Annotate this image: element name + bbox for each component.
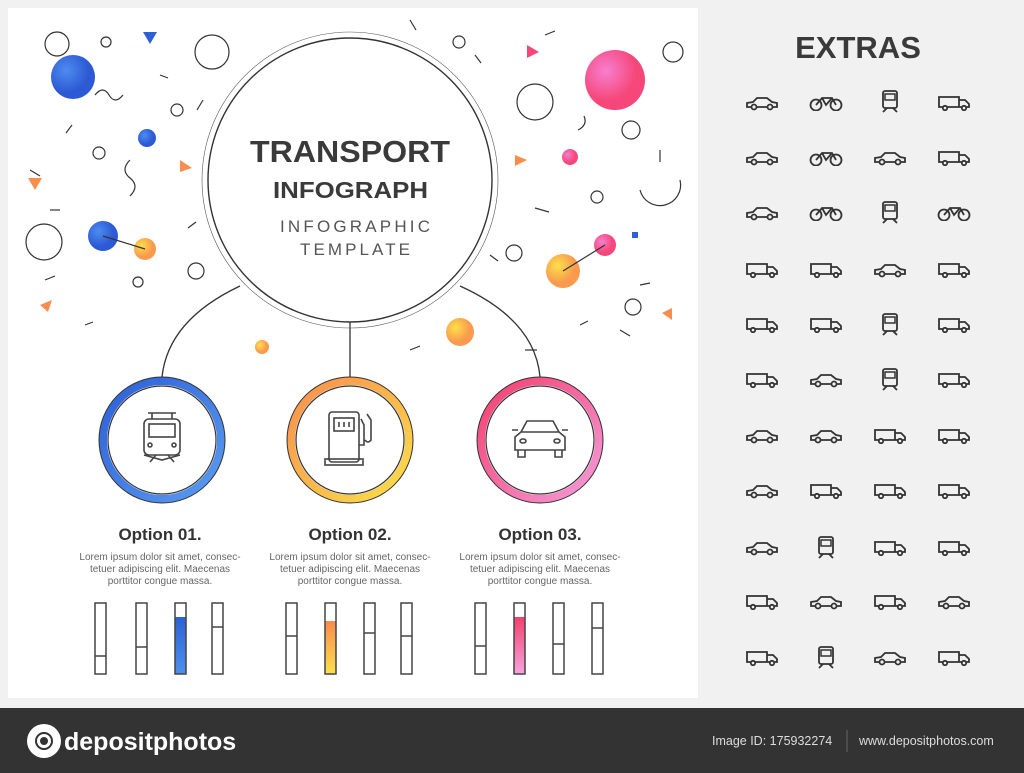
panel: main infographic	[8, 8, 698, 698]
option 3 text	[459, 525, 621, 587]
option 3 ring with car icon	[477, 377, 603, 503]
option 2 text: Lorem ipsum dolor sit amet, consec-	[269, 552, 431, 563]
connector lines	[162, 286, 540, 377]
option 3 text: tetuer adipiscing elit. Maecenas	[470, 564, 610, 575]
option 1 text	[79, 525, 241, 587]
option 2 text	[269, 525, 431, 587]
extras heading: EXTRAS	[795, 30, 921, 65]
option 3 text: Lorem ipsum dolor sit amet, consec-	[459, 552, 621, 563]
option 1 text: Option 01.	[118, 525, 202, 544]
option 2 ring with fuel pump icon	[287, 377, 413, 503]
central title circle	[202, 32, 498, 328]
option 3 text: porttitor congue massa.	[488, 576, 592, 587]
option 1 text: porttitor congue massa.	[108, 576, 212, 587]
extras icon grid	[747, 91, 970, 668]
option 2 text: Option 02.	[308, 525, 392, 544]
subtitle: INFOGRAPH	[273, 177, 428, 203]
option 1 ring with tram icon	[99, 377, 225, 503]
footer image id: Image ID: 175932274	[712, 734, 832, 748]
bar chart option 3	[475, 603, 603, 674]
option 2 text: tetuer adipiscing elit. Maecenas	[280, 564, 420, 575]
bar chart option 2	[286, 603, 412, 674]
footer logo	[27, 724, 236, 758]
template label	[280, 217, 430, 259]
decorative confetti	[26, 20, 683, 354]
option 2 text: porttitor congue massa.	[298, 576, 402, 587]
footer bar	[0, 708, 1024, 773]
footer image id	[712, 730, 994, 752]
option 1 text: Lorem ipsum dolor sit amet, consec-	[79, 552, 241, 563]
template label: TEMPLATE	[300, 240, 410, 259]
title: TRANSPORT	[250, 134, 450, 169]
footer logo: depositphotos	[64, 728, 236, 756]
option 1 text: tetuer adipiscing elit. Maecenas	[90, 564, 230, 575]
template label: INFOGRAPHIC	[280, 217, 430, 236]
bar chart option 1	[95, 603, 223, 674]
option 3 text: Option 03.	[498, 525, 582, 544]
footer image id: www.depositphotos.com	[858, 734, 994, 748]
